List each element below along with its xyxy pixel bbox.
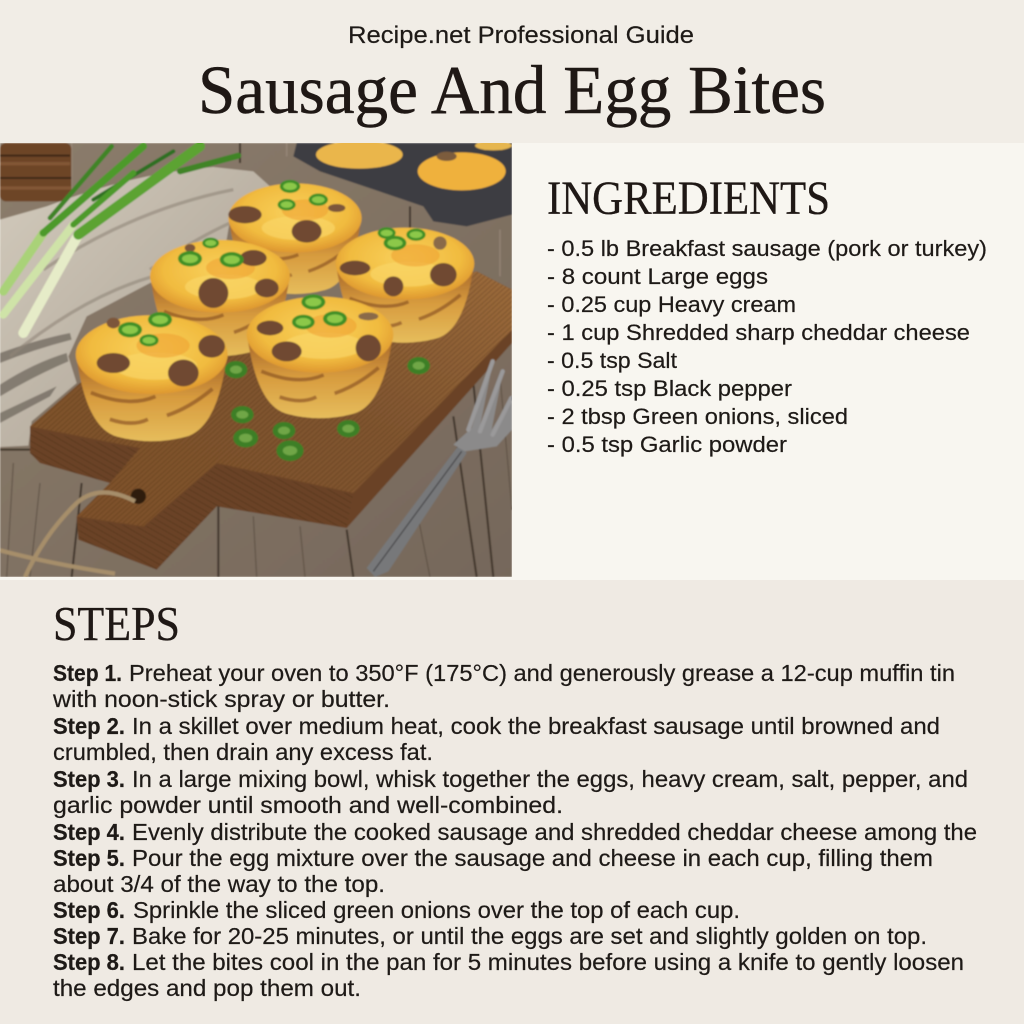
scattered onions <box>225 357 430 461</box>
steps list: garlic powder until smooth and well-combined. <box>53 792 563 818</box>
linen towel <box>0 167 270 447</box>
steps list: Step 1. <box>53 660 122 686</box>
steps list: with noon-stick spray or butter. <box>52 686 390 712</box>
muffin back <box>228 180 362 294</box>
panel: steps <box>0 580 1024 1024</box>
muffin tin <box>293 141 512 226</box>
ingredients list: - 1 cup Shredded sharp cheddar cheese <box>547 320 970 345</box>
steps list: Preheat your oven to 350°F (175°C) and generously grease a 12-cup muffin tin <box>129 660 955 686</box>
ingredients list: - 0.25 cup Heavy cream <box>547 292 796 317</box>
steps list: Step 3. <box>53 766 125 792</box>
header band <box>0 0 1024 143</box>
steps list: Step 4. <box>53 819 125 845</box>
steps heading: STEPS <box>53 596 180 651</box>
steps list: Step 2. <box>53 713 125 739</box>
steps list: Sprinkle the sliced green onions over the top of each cup. <box>133 897 740 923</box>
ingredients list: - 0.5 lb Breakfast sausage (pork or turkey) <box>547 236 987 261</box>
steps list: Step 6. <box>53 897 125 923</box>
steps list: Step 5. <box>53 845 125 871</box>
steps list: Pour the egg mixture over the sausage and cheese in each cup, filling them <box>132 845 933 871</box>
green onions <box>3 146 238 333</box>
food photo illustration <box>0 143 512 577</box>
muffin front left <box>76 312 228 441</box>
cutting board <box>30 271 512 570</box>
twine <box>0 492 135 577</box>
ingredients list: - 8 count Large eggs <box>547 264 768 289</box>
ingredients heading: INGREDIENTS <box>547 172 830 225</box>
ingredients list: - 0.25 tsp Black pepper <box>547 376 793 401</box>
ingredients list: - 0.5 tsp Garlic powder <box>547 432 788 457</box>
panel: ingredients <box>512 143 1024 577</box>
muffin front right <box>247 294 393 418</box>
ingredients list: - 0.5 tsp Salt <box>547 348 678 373</box>
steps list: the edges and pop them out. <box>53 975 361 1001</box>
muffin middle <box>150 238 290 356</box>
title: Sausage And Egg Bites <box>198 52 826 128</box>
wooden table <box>0 143 512 577</box>
steps list <box>52 660 977 1001</box>
fork <box>367 360 512 577</box>
ingredients list: - 2 tbsp Green onions, sliced <box>547 404 848 429</box>
steps list: In a large mixing bowl, whisk together the eggs, heavy cream, salt, pepper, and <box>132 766 968 792</box>
muffin right <box>336 227 474 343</box>
steps list: Step 8. <box>53 949 125 975</box>
steps list: about 3/4 of the way to the top. <box>53 871 385 897</box>
ingredients list <box>547 236 987 457</box>
pepper mill <box>0 143 71 201</box>
steps list: crumbled, then drain any excess fat. <box>53 739 433 765</box>
steps list: Bake for 20-25 minutes, or until the eggs are set and slightly golden on top. <box>132 923 927 949</box>
steps list: Step 7. <box>53 923 125 949</box>
steps list: Evenly distribute the cooked sausage and shredded cheddar cheese among the <box>132 819 977 845</box>
subtitle: Recipe.net Professional Guide <box>348 22 694 49</box>
steps list: Let the bites cool in the pan for 5 minutes before using a knife to gently loosen <box>132 949 964 975</box>
steps list: In a skillet over medium heat, cook the breakfast sausage until browned and <box>132 713 940 739</box>
